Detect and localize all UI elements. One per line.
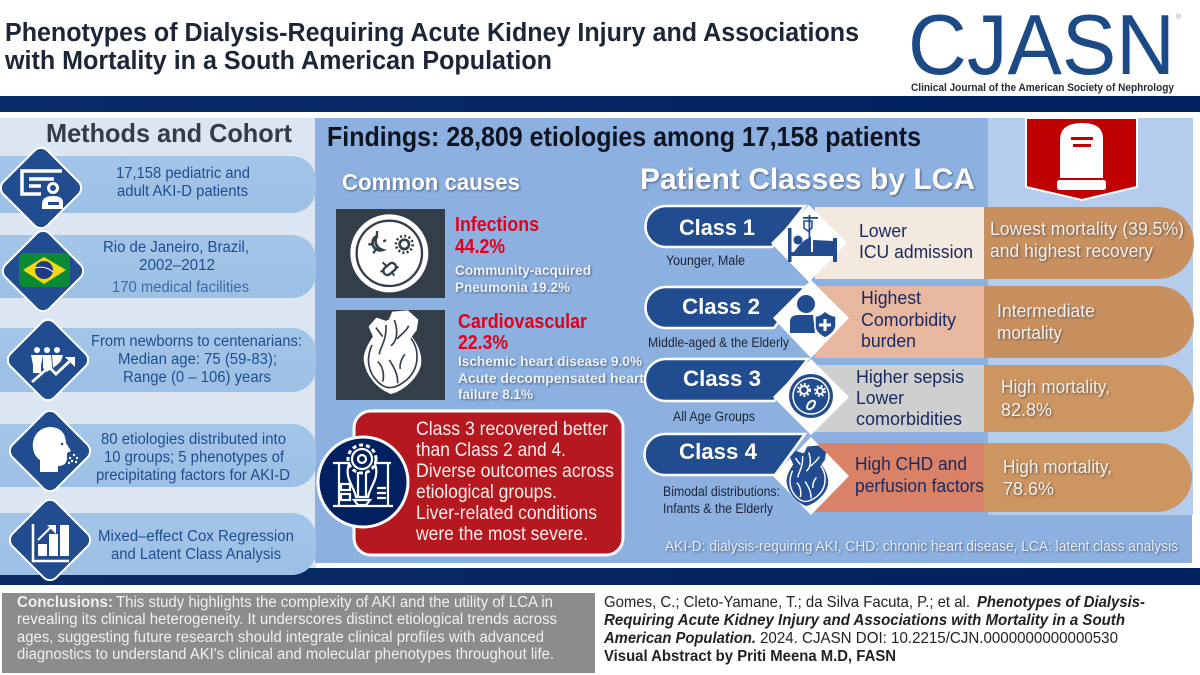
panel: conclusions: Conclusions: bbox=[17, 594, 113, 611]
panel: class 2 row: burden bbox=[861, 331, 916, 351]
icon: infection petri dish bbox=[336, 209, 445, 298]
icon: lightbulb with gear bbox=[318, 437, 408, 527]
text: cardiovascular: Ischemic heart disease 9.0% bbox=[458, 353, 643, 369]
panel: class 4 row: High mortality, bbox=[1003, 456, 1112, 477]
panel: conclusions: revealing its clinical heterogeneity. It underscores distinct etiological trends across bbox=[17, 611, 557, 628]
panel: etiologies item bbox=[0, 407, 316, 495]
panel: class 1 row: Younger, Male bbox=[666, 253, 745, 268]
panel: location item: 2002–2012 bbox=[139, 257, 215, 274]
panel: location item bbox=[0, 227, 316, 315]
panel: conclusions: diagnostics to understand AKI's clinical and molecular phenotypes throughout life. bbox=[17, 646, 554, 663]
CJASN logo: Clinical Journal of the American Society of Nephrology bbox=[911, 82, 1175, 94]
text: infections: Infections bbox=[455, 214, 539, 236]
panel: class 2 row: Middle-aged & the Elderly bbox=[648, 335, 789, 350]
panel: class 3 row: comorbidities bbox=[856, 409, 962, 429]
panel: class 1 row bbox=[646, 205, 1194, 282]
text: infections: 44.2% bbox=[455, 236, 505, 258]
text: cardiovascular: failure 8.1% bbox=[458, 386, 534, 402]
panel: statistical methods item: and Latent Class Analysis bbox=[111, 546, 281, 563]
panel: class 2 row: mortality bbox=[997, 322, 1063, 343]
icon: head breathing bbox=[6, 407, 94, 495]
citation: Phenotypes of Dialysis- bbox=[977, 594, 1145, 611]
icon: bar chart bbox=[6, 496, 94, 584]
text: cardiovascular: 22.3% bbox=[458, 332, 508, 354]
panel: etiologies item: 80 etiologies distributed into bbox=[101, 431, 286, 448]
panel: age item: Range (0 – 106) years bbox=[123, 369, 271, 386]
callout: recovery findings: than Class 2 and 4. bbox=[416, 439, 566, 461]
panel: class 4 row: Infants & the Elderly bbox=[663, 501, 773, 516]
callout: recovery findings bbox=[318, 411, 623, 555]
callout: recovery findings: Class 3 recovered better bbox=[416, 418, 608, 440]
callout: recovery findings: etiological groups. bbox=[416, 481, 557, 503]
panel: location item: 170 medical facilities bbox=[112, 279, 249, 296]
panel: class 1 row: Lower bbox=[859, 221, 907, 241]
text: cardiovascular: Acute decompensated heart bbox=[458, 370, 644, 386]
panel: etiologies item: 10 groups; 5 phenotypes of bbox=[104, 449, 285, 466]
citation: 2024. CJASN DOI: 10.2215/CJN.0000000000000530 bbox=[760, 630, 1118, 647]
panel: conclusions: ages, suggesting future research should integrate clinical profiles with advanced bbox=[17, 629, 544, 646]
heading: common causes: Common causes bbox=[342, 169, 520, 195]
panel: class 2 row: Intermediate bbox=[997, 300, 1095, 321]
heading: methods and cohort: Methods and Cohort bbox=[46, 118, 292, 148]
callout: recovery findings: Liver-related conditions bbox=[416, 502, 597, 524]
icon: tombstone banner bbox=[1026, 118, 1137, 200]
panel: age item: Median age: 75 (59-83); bbox=[118, 351, 277, 368]
panel: findings background bbox=[315, 118, 1192, 563]
CJASN logo: CJASN bbox=[908, 0, 1175, 93]
panel: class 1 row: Lowest mortality (39.5%) bbox=[990, 218, 1184, 239]
text: infections: Community-acquired bbox=[455, 262, 591, 278]
heading: findings: Findings: 28,809 etiologies among 17,158 patients bbox=[327, 121, 921, 152]
panel: class 2 row: Comorbidity bbox=[861, 310, 956, 330]
panel: class 1 row: and highest recovery bbox=[990, 240, 1154, 261]
icon: heart bbox=[336, 310, 445, 400]
citation: American Population. bbox=[603, 630, 756, 647]
panel: class 4 row: 78.6% bbox=[1003, 478, 1054, 499]
text: infections: Pneumonia 19.2% bbox=[455, 279, 571, 295]
panel: class 3 row: High mortality, bbox=[1001, 376, 1110, 397]
callout: recovery findings: Diverse outcomes across bbox=[416, 460, 614, 482]
panel: location item: Rio de Janeiro, Brazil, bbox=[103, 239, 249, 256]
panel: methods and cohort background bbox=[0, 118, 316, 568]
panel: cohort item: adult AKI-D patients bbox=[117, 183, 248, 200]
panel: class 2 row: Class 2 bbox=[682, 294, 760, 319]
citation: Requiring Acute Kidney Injury and Associations with Mortality in a South bbox=[604, 612, 1125, 629]
panel: class 3 row: All Age Groups bbox=[673, 409, 755, 424]
panel: age item bbox=[0, 316, 316, 404]
panel: class 3 row: Higher sepsis bbox=[856, 367, 964, 387]
panel: class 2 row: Highest bbox=[861, 288, 921, 308]
citation: Visual Abstract by Priti Meena M.D, FASN bbox=[604, 648, 896, 665]
panel: class 4 row: Class 4 bbox=[679, 439, 758, 464]
bottom navy band bbox=[0, 568, 1200, 585]
title bbox=[4, 19, 859, 75]
panel: class 1 row: Class 1 bbox=[679, 215, 755, 240]
panel: cohort item bbox=[0, 144, 316, 232]
panel: class 3 row: Class 3 bbox=[683, 366, 761, 391]
panel: conclusions: This study highlights the complexity of AKI and the utility of LCA in bbox=[116, 594, 553, 611]
CJASN logo: ® bbox=[1176, 13, 1182, 21]
citation bbox=[603, 594, 1145, 665]
panel: etiologies item: precipitating factors for AKI-D bbox=[96, 467, 290, 484]
panel: statistical methods item: Mixed–effect Cox Regression bbox=[98, 528, 294, 545]
text: infections bbox=[455, 214, 591, 295]
footnote: abbreviations: AKI-D: dialysis-requiring AKI, CHD: chronic heart disease, LCA: latent class analysis bbox=[665, 539, 1178, 555]
icon: people and rising trend bbox=[4, 316, 92, 404]
panel: class 3 row: 82.8% bbox=[1001, 399, 1052, 420]
citation: Gomes, C.; Cleto-Yamane, T.; da Silva Facuta, P.; et al. bbox=[604, 594, 970, 611]
icon: hospital bed bbox=[788, 215, 837, 262]
panel: class 4 row bbox=[644, 434, 1192, 516]
icon: blue heart bbox=[787, 446, 828, 506]
title: with Mortality in a South American Population bbox=[4, 47, 552, 75]
panel: class 4 row: Bimodal distributions: bbox=[663, 484, 780, 499]
panel: age item: From newborns to centenarians: bbox=[91, 333, 302, 350]
panel: class 3 row: Lower bbox=[856, 388, 904, 408]
panel: statistical methods item bbox=[0, 496, 316, 584]
panel: class 3 row bbox=[645, 359, 1194, 435]
panel: mortality column background bbox=[988, 118, 1193, 515]
icon: Brazil flag bbox=[0, 227, 87, 315]
text: cardiovascular: Cardiovascular bbox=[458, 311, 587, 333]
callout: recovery findings: were the most severe. bbox=[415, 523, 588, 545]
text: cardiovascular bbox=[458, 311, 644, 402]
icon: patient record bbox=[0, 144, 85, 232]
title: Phenotypes of Dialysis-Requiring Acute Kidney Injury and Associations bbox=[5, 19, 859, 47]
icon: person with shield bbox=[790, 295, 836, 338]
icon: pathogens dish bbox=[789, 374, 833, 418]
panel: class 2 row bbox=[646, 280, 1194, 358]
panel: class 4 row: High CHD and bbox=[855, 454, 967, 474]
heading: patient classes: Patient Classes by LCA bbox=[640, 163, 975, 196]
panel: class 4 row: perfusion factors bbox=[855, 476, 984, 496]
panel: cohort item: 17,158 pediatric and bbox=[116, 165, 250, 182]
panel: conclusions bbox=[2, 593, 595, 673]
panel: class 1 row: ICU admission bbox=[859, 242, 973, 262]
